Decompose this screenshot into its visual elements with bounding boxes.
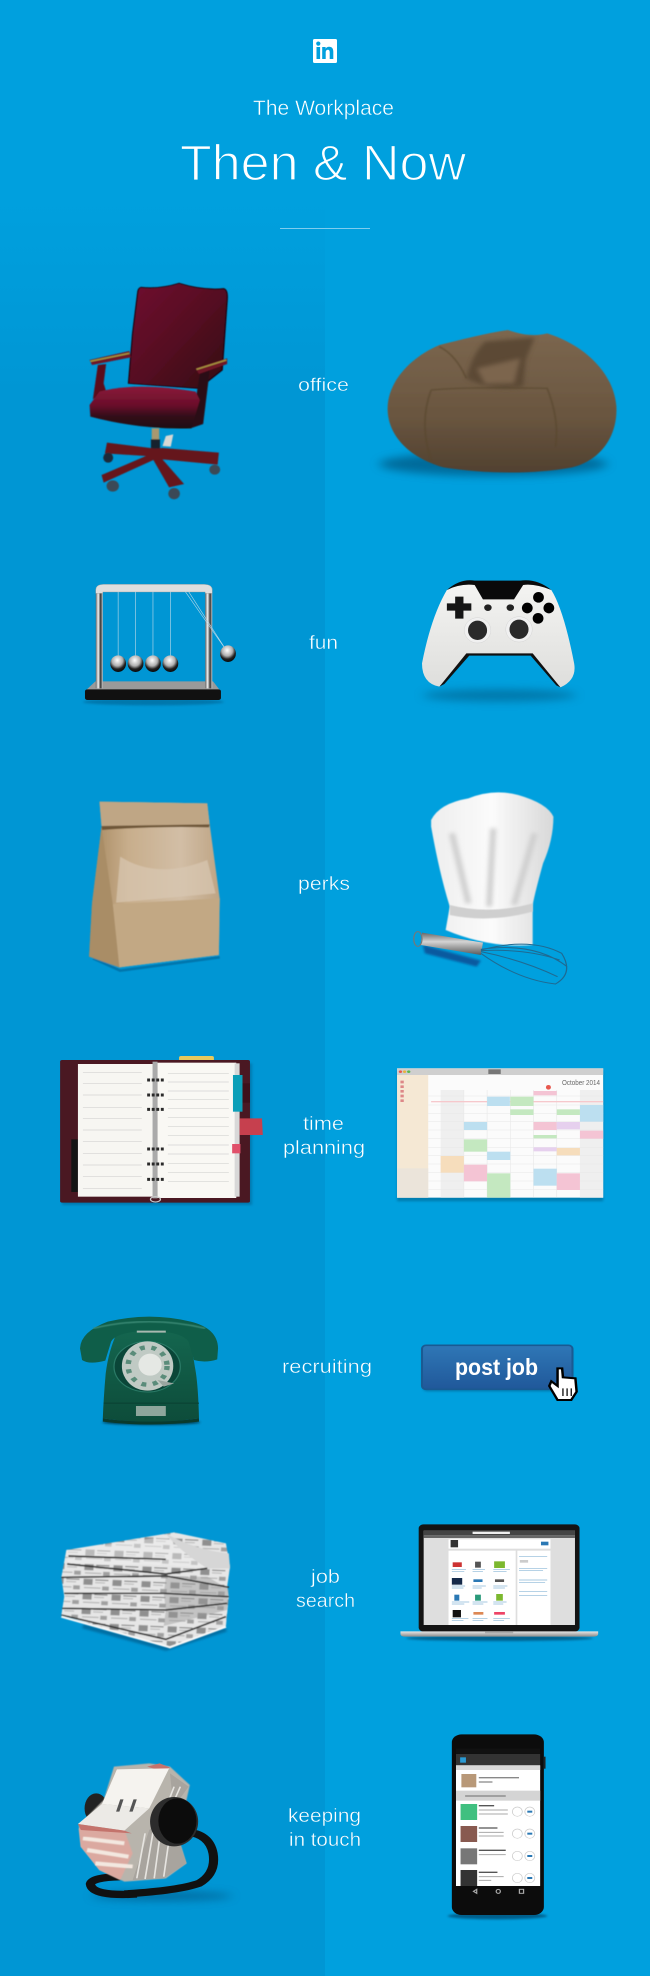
icon: paper lunch bag <box>89 802 220 971</box>
subtitle: The Workplace <box>253 97 394 120</box>
label: keeping: keeping <box>288 1806 361 1827</box>
label: job: job <box>310 1567 340 1588</box>
icon: smartphone <box>448 1734 547 1919</box>
icon: rotary telephone <box>80 1317 218 1425</box>
title: Then & Now <box>180 135 467 191</box>
icon: newton's cradle <box>83 584 236 705</box>
label: fun: fun <box>309 633 338 654</box>
label: planning: planning <box>283 1138 365 1159</box>
icon: paper planner <box>60 1056 263 1205</box>
label: recruiting: recruiting <box>282 1357 372 1378</box>
label: perks: perks <box>298 874 350 895</box>
icon: chef hat and whisk <box>414 792 567 984</box>
label: in touch: in touch <box>289 1830 361 1851</box>
icon: newspaper stack <box>61 1532 230 1648</box>
icon: bean bag <box>379 330 616 476</box>
icon: laptop <box>400 1524 598 1641</box>
divider <box>280 228 370 229</box>
logo: LinkedIn <box>313 39 337 63</box>
background: left half <box>0 0 325 1976</box>
icon: digital calendar <box>397 1068 603 1201</box>
icon: leather office chair <box>90 283 227 499</box>
label: office: office <box>298 374 349 395</box>
label: search: search <box>296 1591 355 1612</box>
calendar month heading: October 2014 <box>562 1078 600 1087</box>
icon: rolodex <box>78 1763 232 1901</box>
button: post job <box>422 1345 572 1391</box>
icon: game controller <box>422 580 576 701</box>
label: time: time <box>303 1114 344 1135</box>
button: post job: post job <box>455 1354 538 1380</box>
icon: hand cursor <box>549 1368 577 1400</box>
